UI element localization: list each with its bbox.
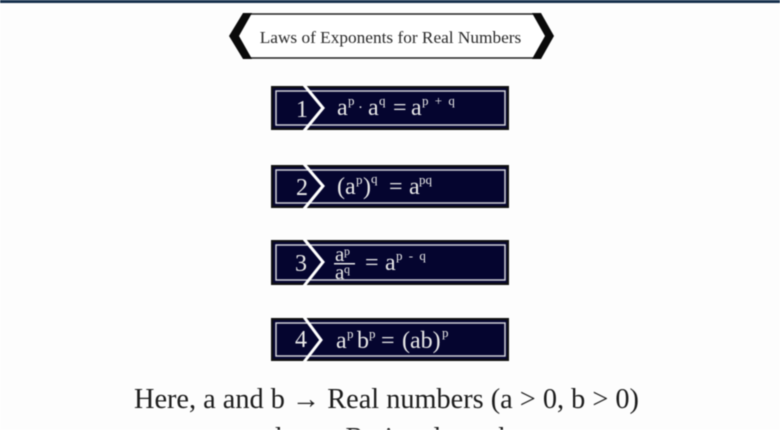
law 3 box: a: [335, 242, 345, 266]
law 1 box: [272, 85, 508, 131]
title banner: Laws of Exponents for Real Numbers: [260, 28, 522, 47]
law 2 box: pq: [419, 172, 432, 187]
law 4 box: p: [369, 326, 376, 341]
law 3 box: p: [344, 244, 350, 258]
law 1 box: q: [379, 93, 386, 108]
law 2 box: q: [371, 171, 378, 186]
law 4 box: p: [347, 326, 354, 341]
law 4 box: 4: [295, 327, 307, 353]
law 4 box: (ab): [402, 328, 441, 354]
law 2 box: 2: [296, 175, 308, 201]
title banner: [229, 13, 554, 59]
law 4 box: [272, 317, 508, 362]
law 1 box: a: [337, 95, 348, 121]
law 1 box: a: [368, 95, 379, 121]
law 3 box: p - q: [396, 248, 426, 263]
law 3 box: a: [385, 250, 396, 276]
note: real numbers: Here, a and b → Real numbers (a > 0, b > 0): [134, 384, 639, 415]
law 4 box: b: [357, 328, 369, 354]
law 3 box: a: [335, 260, 345, 284]
law 1 box: a: [411, 95, 422, 121]
law 1 box: =: [393, 95, 407, 121]
law 4 box: =: [381, 328, 395, 354]
top edge strip: [0, 0, 780, 3]
law 2 box: [272, 164, 508, 209]
law 4 box: p: [442, 325, 448, 340]
law 4 box: a: [336, 328, 347, 354]
law 3 box: =: [365, 250, 379, 276]
law 3 box: [272, 239, 508, 286]
law 1 box: ·: [358, 100, 363, 116]
law 2 box: a: [409, 174, 420, 200]
law 1 box: p + q: [422, 93, 455, 108]
law 3 box: q: [344, 262, 350, 276]
law 2 box: (a: [337, 174, 356, 200]
law 3 box: 3: [295, 251, 307, 277]
law 2 box: =: [389, 174, 403, 200]
law 2 box: p: [356, 172, 362, 187]
law 2 box: ): [363, 174, 371, 200]
law 1 box: p: [348, 93, 354, 108]
law 1 box: 1: [296, 97, 308, 123]
